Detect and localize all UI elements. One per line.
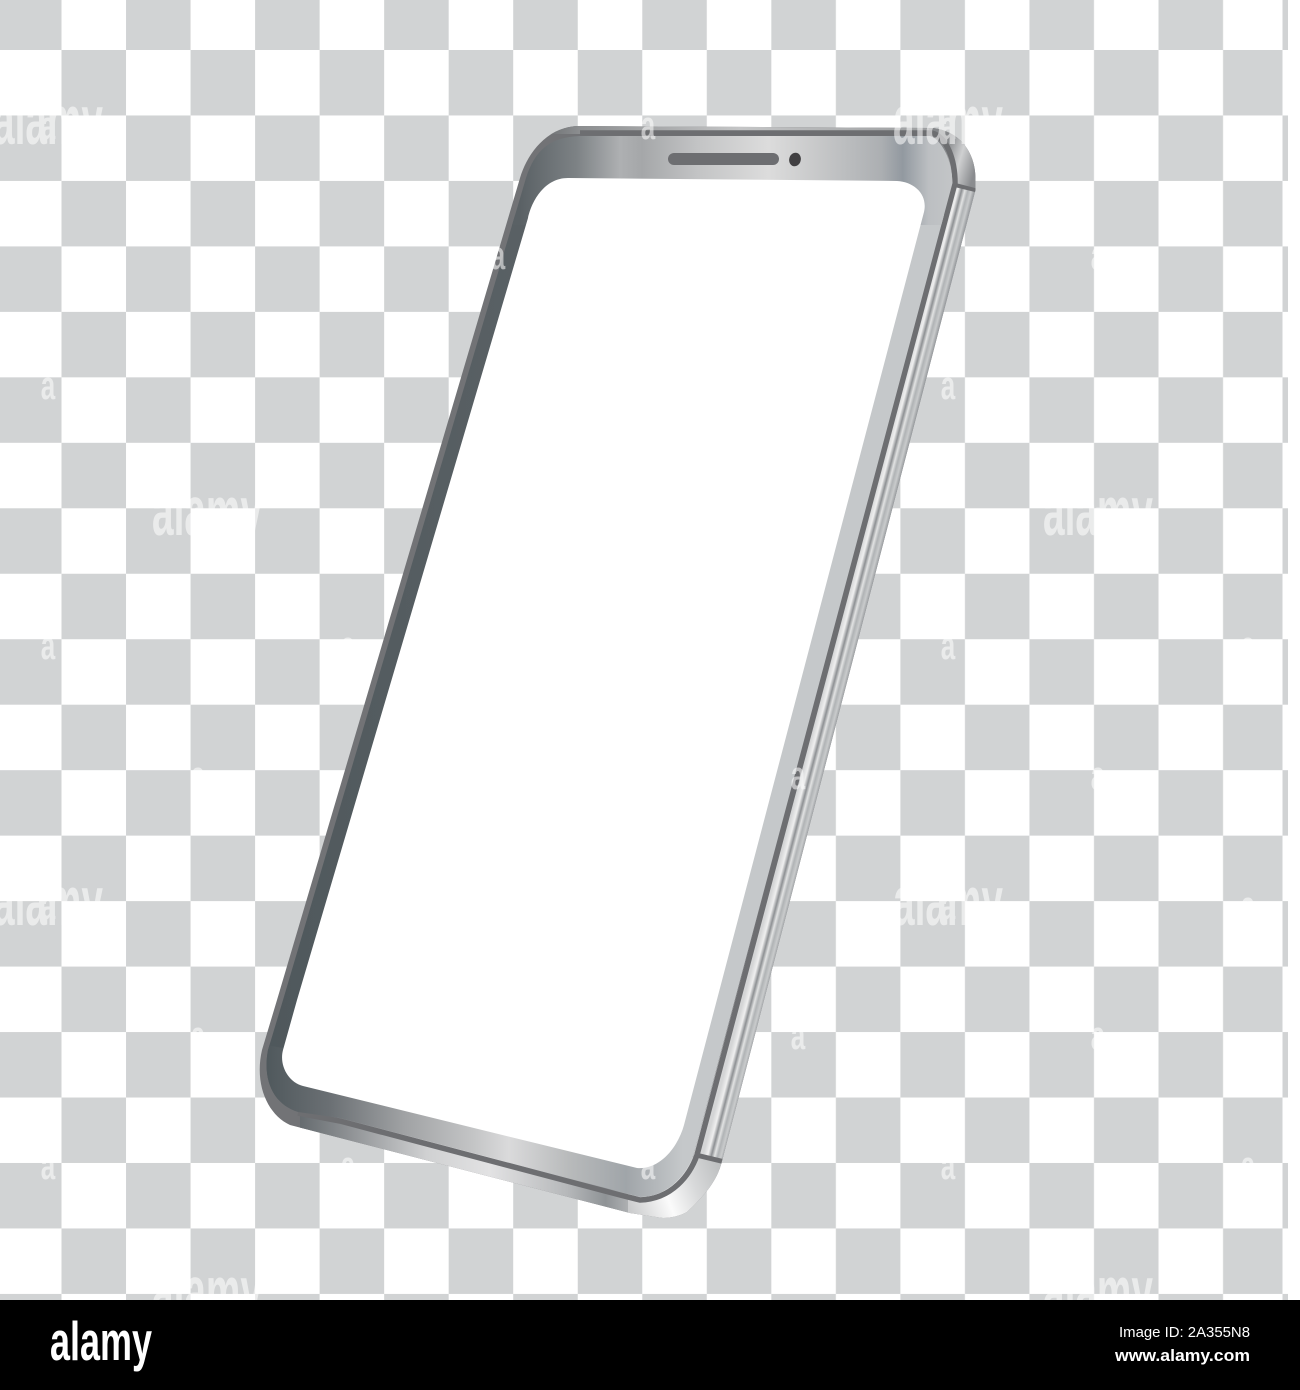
footer logo: alamy [50, 1310, 152, 1372]
small watermark letters: aaaa [191, 233, 1105, 278]
phone silhouette and left lip [260, 126, 976, 1218]
image id: Image ID: 2A355N8 [1119, 1324, 1250, 1341]
bottom edge strip [300, 1116, 628, 1212]
top right corner cap [929, 128, 976, 188]
phone metal edges [300, 120, 985, 1230]
large watermark words: alamy [152, 1252, 262, 1330]
large watermark words: alamy [893, 81, 1003, 159]
top rim [552, 126, 930, 134]
smartphone mockup [240, 120, 1000, 1260]
website: www.alamy.com [1114, 1346, 1250, 1365]
large watermark words: alamy [152, 472, 262, 550]
large watermark words: alamy [1043, 472, 1153, 550]
right bezel [684, 215, 944, 1140]
small watermark letters: aaaaa [41, 883, 1255, 928]
left bezel [266, 225, 526, 1085]
front face seam line [298, 133, 955, 1200]
small watermark letters [41, 103, 1255, 1188]
side band joint, top [953, 184, 977, 190]
screen [282, 178, 925, 1168]
large watermark words [0, 81, 1153, 1330]
front bezel [266, 136, 952, 1197]
small watermark letters: aaaaa [41, 623, 1255, 668]
small watermark letters: aaaaa [41, 1143, 1255, 1188]
side band joint, bottom [696, 1155, 723, 1162]
right side chrome band [693, 183, 985, 1163]
small watermark letters: aaaaa [41, 103, 1255, 148]
small watermark letters: aaaa [191, 493, 1105, 538]
small watermark letters: aaaa [191, 1013, 1105, 1058]
bottom right corner cap [628, 1157, 722, 1218]
front camera [788, 151, 802, 168]
large watermark words: alamy [1043, 1252, 1153, 1330]
top bezel [515, 136, 952, 225]
large watermark words: alamy [893, 862, 1003, 940]
speaker slot [668, 153, 779, 165]
small watermark letters: aaaa [191, 753, 1105, 798]
footer bar [0, 1300, 1300, 1390]
small watermark letters: aaaaa [41, 363, 1255, 408]
bottom bezel [279, 1074, 701, 1197]
